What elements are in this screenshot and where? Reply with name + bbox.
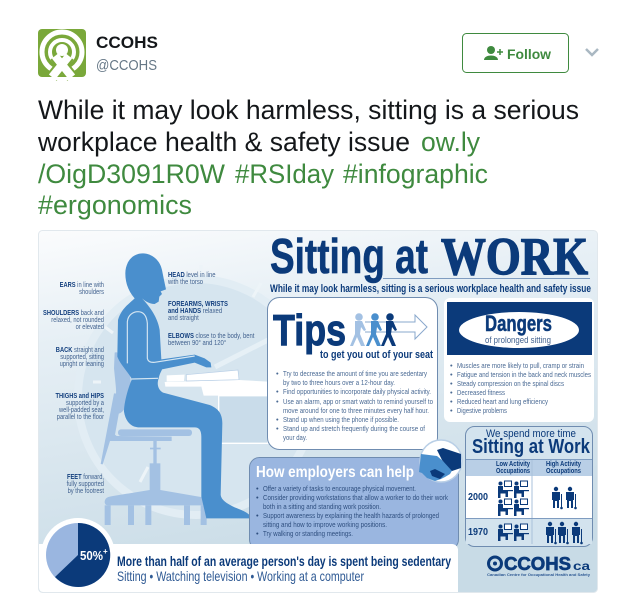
label: ears: shoulders xyxy=(79,288,105,296)
employers list: Consider providing workstations that allow a worker to do their work xyxy=(263,493,448,502)
pie chart: 50%+ xyxy=(41,518,115,592)
tips list: Stand up and stretch frequently during the course of xyxy=(283,424,426,433)
tips list: Stand up when using the phone if possible. xyxy=(283,415,399,424)
label: ears: EARS in line with xyxy=(60,281,104,289)
dangers list: Fatigue and tension in the back and neck muscles xyxy=(457,370,591,379)
label: back: supported, sitting xyxy=(60,353,104,361)
employers list xyxy=(256,484,448,538)
main title: WORK xyxy=(441,228,588,286)
account handle: @CCOHS xyxy=(96,57,157,74)
tweet text: ow.ly xyxy=(421,127,480,157)
panel: dangers xyxy=(444,298,594,422)
tips list: your day. xyxy=(283,433,307,442)
CCOHS logo: Canadian Centre for Occupational Health and Safety xyxy=(487,573,591,577)
dangers list: • xyxy=(450,379,453,388)
employers list: • xyxy=(256,529,259,538)
tweet text xyxy=(37,95,579,220)
label: back xyxy=(56,346,104,368)
pie chart: 50%+: + xyxy=(103,547,108,556)
label: head xyxy=(167,272,216,286)
label: shoulders: or elevated xyxy=(76,323,104,331)
comparison heading: Sitting at Work xyxy=(472,436,591,458)
clock background xyxy=(78,265,314,515)
tips list: by two to three hours over a 12-hour day. xyxy=(283,378,395,387)
arrow xyxy=(365,315,427,339)
panel: sedentary callout xyxy=(39,518,458,592)
chair xyxy=(101,352,207,525)
label: back: upright or leaning xyxy=(60,360,104,368)
employers list: Support awareness by explaining the health hazards of prolonged xyxy=(263,511,439,520)
row: 1970: 1970 xyxy=(468,527,488,538)
employers list: both in a sitting and standing work position. xyxy=(263,502,381,511)
tweet header xyxy=(38,29,598,80)
row: 2000: 2000 xyxy=(468,492,488,503)
column headers: High Activity xyxy=(546,461,581,468)
label: thighs and hips: supported by a xyxy=(66,399,104,407)
panel: tips xyxy=(268,298,438,450)
label: ears xyxy=(60,281,105,296)
comparison heading: We spend more time xyxy=(486,428,576,440)
infographic card xyxy=(38,228,598,592)
tweet text: While it may look harmless, sitting is a serious xyxy=(38,95,579,125)
dangers list: Decreased fitness xyxy=(457,388,505,397)
dangers list: Steady compression on the spinal discs xyxy=(457,379,564,388)
label: shoulders: relaxed, not rounded xyxy=(51,316,104,324)
dangers list xyxy=(450,361,591,415)
account name: CCOHS xyxy=(96,33,158,52)
tips heading: Tips xyxy=(273,306,346,355)
label: elbows xyxy=(168,333,255,347)
dangers list: • xyxy=(450,361,453,370)
label: forearms: and straight xyxy=(168,315,199,322)
tips list: • xyxy=(276,424,279,433)
tips list: Try to decrease the amount of time you are sedentary xyxy=(283,369,427,378)
label: shoulders: SHOULDERS back and xyxy=(43,309,104,317)
icon: CCOHS avatar xyxy=(38,29,86,80)
label: thighs and hips: THIGHS and HIPS xyxy=(55,392,105,400)
employers list: • xyxy=(256,511,259,520)
main title xyxy=(270,228,590,286)
arm outline xyxy=(127,312,195,379)
icon: handshake xyxy=(419,440,462,482)
CCOHS logo: CCOHS xyxy=(504,554,571,574)
dangers list: • xyxy=(450,370,453,379)
label: feet: fully supported xyxy=(67,480,104,488)
employers list: • xyxy=(256,493,259,502)
column headers: Occupations xyxy=(496,468,530,475)
label: head: with the torso xyxy=(167,279,203,286)
dangers list: Muscles are more likely to pull, cramp or strain xyxy=(457,361,584,370)
employers heading: How employers can help xyxy=(256,464,414,481)
panel: we spend more time sitting at work xyxy=(466,426,592,546)
CCOHS logo: ca xyxy=(573,559,590,573)
label: thighs and hips: parallel to the floor xyxy=(57,413,105,421)
tips list: • xyxy=(276,387,279,396)
posture labels: right xyxy=(167,272,255,347)
tweet text: /OigD3091R0W xyxy=(38,159,225,189)
icon: dropdown chevron xyxy=(586,49,598,55)
label: back: BACK straight and xyxy=(56,346,104,354)
employers list: Try walking or standing meetings. xyxy=(263,529,353,538)
dangers list: • xyxy=(450,388,453,397)
CCOHS logo xyxy=(487,554,591,577)
dangers subheading: of prolonged sitting xyxy=(485,335,551,346)
label: elbows: between 90° and 120° xyxy=(168,338,227,347)
tweet text: #RSIday xyxy=(235,159,334,189)
column headers: Low Activity xyxy=(496,461,530,468)
label: elbows: ELBOWS close to the body, bent xyxy=(168,333,255,340)
callout headline: More than half of an average person's day is spent being sedentary xyxy=(117,553,451,569)
column headers xyxy=(496,461,581,475)
dangers heading: Dangers xyxy=(485,311,552,336)
main title: Sitting at xyxy=(270,230,428,284)
label: shoulders xyxy=(43,309,104,331)
label: feet: FEET forward, xyxy=(67,473,104,481)
label: thighs and hips xyxy=(55,392,105,421)
employers list: sitting and how to improve working positions. xyxy=(263,520,387,529)
icon: walking figures xyxy=(350,313,397,346)
tips list: • xyxy=(276,415,279,424)
label: feet: by the footrest xyxy=(68,487,104,495)
desk and keyboard xyxy=(165,370,268,443)
label: thighs and hips: well-padded seat, xyxy=(58,406,104,414)
tips list: • xyxy=(276,397,279,406)
tips list xyxy=(276,369,433,442)
tips subheading: to get you out of your seat xyxy=(320,349,433,361)
dangers banner xyxy=(447,302,592,355)
label: forearms xyxy=(168,301,229,322)
tips list: • xyxy=(276,369,279,378)
pie chart: 50%+: 50% xyxy=(80,548,103,563)
tips list: move around for one to three minutes every half hour. xyxy=(283,406,429,415)
dangers list: Digestive problems xyxy=(457,406,507,415)
employers list: Offer a variety of tasks to encourage physical movement. xyxy=(263,484,416,493)
label: forearms: and HANDS relaxed xyxy=(168,308,222,315)
comparison table xyxy=(466,460,592,544)
follow button: Follow xyxy=(507,46,551,62)
comparison heading xyxy=(472,428,591,458)
label: feet xyxy=(67,473,104,495)
panel: how employers can help xyxy=(250,458,458,550)
posture labels: left xyxy=(43,281,105,495)
callout activities: Sitting • Watching television • Working at a computer xyxy=(117,568,364,584)
label: forearms: FOREARMS, WRISTS xyxy=(168,301,229,308)
dangers list: Reduced heart and lung efficiency xyxy=(457,397,548,406)
column headers: Occupations xyxy=(546,468,581,475)
tweet text: #ergonomics xyxy=(38,190,192,220)
tips list: Use an alarm, app or smart watch to remind yourself to xyxy=(283,397,433,406)
employers list: • xyxy=(256,484,259,493)
tips list: Find opportunities to incorporate daily physical activity. xyxy=(283,387,431,396)
dangers list: • xyxy=(450,397,453,406)
tweet text: #infographic xyxy=(343,159,488,189)
dangers list: • xyxy=(450,406,453,415)
seated person silhouette xyxy=(117,253,251,518)
tweet text: workplace health & safety issue xyxy=(37,127,410,157)
follow button xyxy=(462,34,568,72)
label: head: HEAD level in line xyxy=(168,272,216,279)
